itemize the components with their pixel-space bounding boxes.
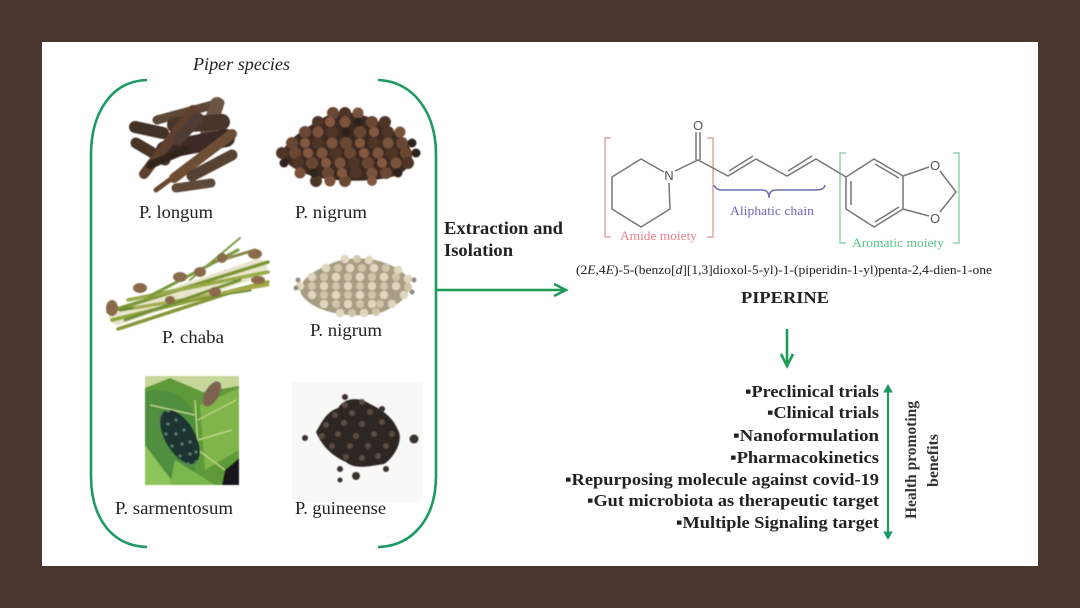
piperine structure diagram bbox=[605, 118, 959, 250]
label: aliphatic chain: Aliphatic chain bbox=[730, 203, 815, 218]
arrow: extraction to piperine bbox=[437, 284, 566, 296]
amide moiety bracket bbox=[605, 138, 713, 237]
right green bracket bbox=[378, 80, 436, 547]
molecule atoms: O bbox=[930, 211, 940, 226]
molecule bonds bbox=[612, 132, 956, 227]
label: amide moiety: Amide moiety bbox=[620, 228, 698, 243]
label: P. nigrum second: P. nigrum bbox=[310, 320, 382, 340]
label: P. longum: P. longum bbox=[139, 202, 213, 222]
label: Health promoting benefits: benefits bbox=[925, 434, 942, 487]
label: Health promoting benefits: Health promoting bbox=[903, 401, 920, 519]
label: P. chaba: P. chaba bbox=[162, 327, 224, 347]
photo: P. chaba stems bbox=[106, 238, 268, 329]
photo: P. sarmentosum leaf bbox=[145, 376, 239, 485]
molecule atoms bbox=[664, 118, 940, 226]
list: applications: ▪Pharmacokinetics bbox=[730, 448, 879, 467]
photo: P. longum bbox=[135, 103, 232, 190]
label: P. nigrum: P. nigrum bbox=[295, 202, 367, 222]
arrow: piperine to benefits bbox=[781, 329, 793, 366]
list: applications: ▪Nanoformulation bbox=[733, 426, 880, 445]
list: applications: ▪Clinical trials bbox=[767, 403, 879, 422]
molecule atoms: O bbox=[930, 158, 940, 173]
list: applications: ▪Gut microbiota as therapeutic target bbox=[587, 491, 879, 510]
left green bracket bbox=[91, 80, 147, 547]
molecule atoms: N bbox=[664, 168, 674, 183]
label: Extraction and Isolation: Isolation bbox=[444, 240, 513, 260]
label: Extraction and Isolation: Extraction and bbox=[444, 218, 563, 238]
photo: P. nigrum white pepper bbox=[296, 258, 414, 315]
label: aromatic moiety: Aromatic moiety bbox=[852, 235, 945, 250]
list: applications: ▪Repurposing molecule against covid-19 bbox=[565, 470, 879, 489]
aliphatic brace bbox=[714, 185, 825, 198]
label: Extraction and Isolation bbox=[444, 218, 563, 260]
list: applications: ▪Multiple Signaling target bbox=[676, 513, 879, 532]
photo: P. guineense bbox=[292, 382, 423, 502]
label: P. sarmentosum: P. sarmentosum bbox=[115, 498, 233, 518]
molecule atoms: O bbox=[693, 118, 703, 133]
list: applications bbox=[565, 382, 880, 532]
label: P. guineense: P. guineense bbox=[295, 498, 386, 518]
heading: Piper species: Piper species bbox=[192, 54, 290, 74]
aromatic moiety bracket bbox=[840, 153, 959, 243]
title: PIPERINE: PIPERINE bbox=[741, 288, 829, 307]
double arrow: health benefits bbox=[884, 385, 892, 539]
white panel bbox=[42, 42, 1038, 566]
label: Health promoting benefits bbox=[903, 401, 942, 519]
IUPAC name: (2E,4E)-5-(benzo[ d][1,3]dioxol-5-yl)-1-(piperidin-1-yl)penta-2,4-dien-1-one bbox=[576, 263, 992, 277]
list: applications: ▪Preclinical trials bbox=[745, 382, 879, 401]
photo: P. nigrum black pepper bbox=[282, 113, 416, 181]
